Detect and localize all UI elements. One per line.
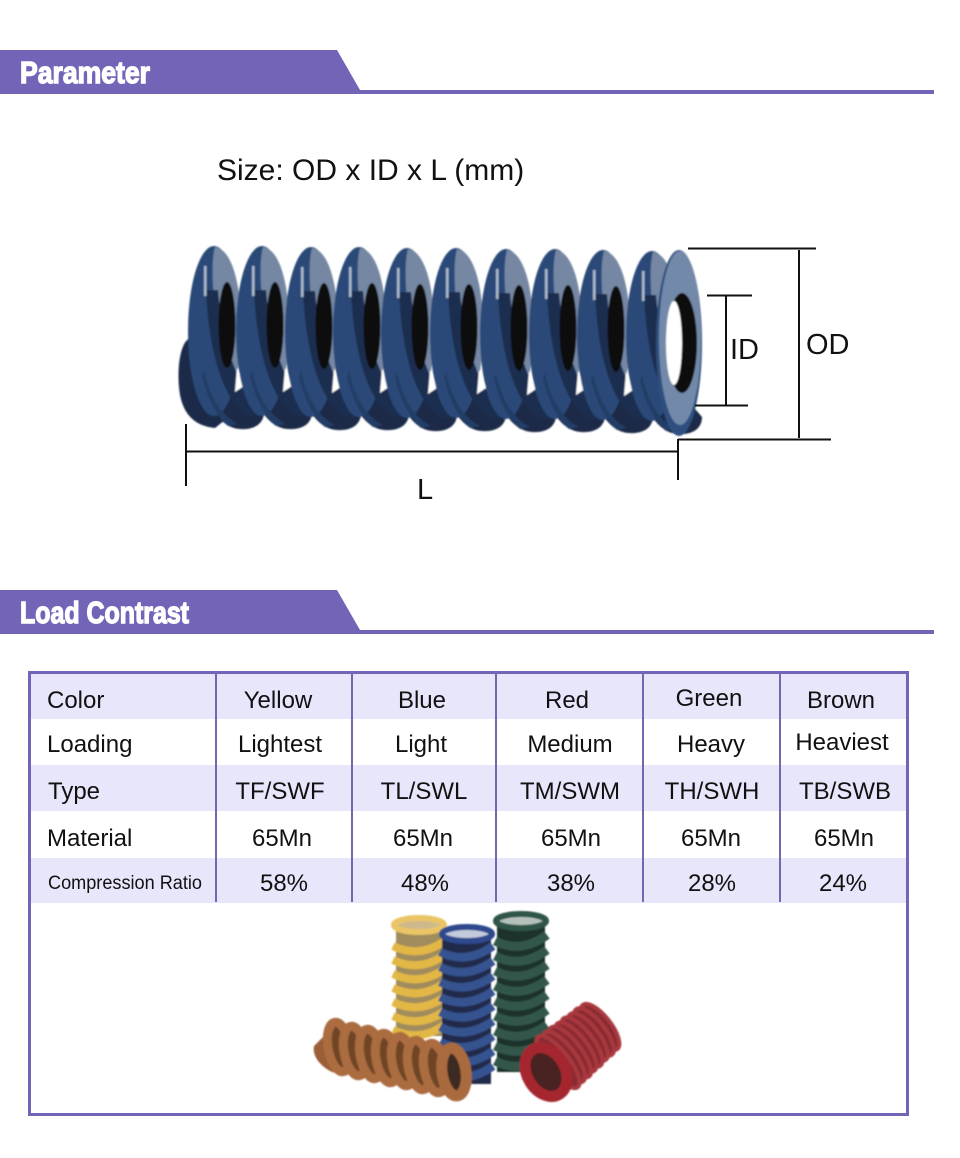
dimension lines: L — [186, 424, 678, 486]
header title: Parameter — [20, 55, 150, 90]
dimension lines: OD — [678, 248, 831, 440]
row: Loading: Light — [395, 731, 447, 758]
row: Type: Type — [48, 778, 100, 805]
row: Material: 65Mn — [814, 825, 874, 852]
row: Material: 65Mn — [252, 825, 312, 852]
row: Type: TL/SWL — [381, 778, 467, 805]
dimension lines: ID — [695, 295, 752, 406]
header banner shape — [0, 50, 934, 94]
row: Type — [48, 778, 891, 805]
icon: blue compression spring — [178, 246, 702, 436]
row: Color: Brown — [807, 687, 875, 714]
row: Type: TM/SWM — [520, 778, 620, 805]
row: Type: TB/SWB — [799, 778, 891, 805]
panel: load contrast table — [30, 672, 908, 1114]
label: OD: OD — [806, 329, 850, 361]
row: Material: 65Mn — [541, 825, 601, 852]
row: Compression Ratio: 24% — [819, 870, 867, 897]
header title: Load Contrast — [20, 595, 189, 630]
icon: blue spring — [440, 927, 493, 1084]
row: Color — [47, 685, 875, 714]
row: Material: 65Mn — [393, 825, 453, 852]
row: Material: Material — [47, 825, 132, 852]
table column separators — [216, 673, 780, 902]
row: Loading: Heavy — [677, 731, 745, 758]
label: ID: ID — [730, 334, 759, 366]
row: Compression Ratio: 58% — [260, 870, 308, 897]
row: Loading: Medium — [527, 731, 613, 758]
row: Compression Ratio — [48, 870, 867, 897]
icon: red spring — [517, 998, 626, 1104]
table row bands — [30, 673, 906, 903]
header banner shape — [0, 590, 934, 634]
row: Loading: Heaviest — [795, 729, 889, 756]
size formula text: Size: OD x ID x L (mm) — [217, 154, 524, 187]
row: Color: Yellow — [244, 687, 313, 714]
row: Loading: Loading — [47, 731, 132, 758]
row: Compression Ratio: 28% — [688, 870, 736, 897]
row: Type: TF/SWF — [235, 778, 325, 805]
row: Material: 65Mn — [681, 825, 741, 852]
row: Color: Green — [676, 685, 742, 712]
table outer border — [30, 672, 908, 1114]
row: Color: Color — [47, 687, 104, 714]
label: L: L — [417, 474, 433, 506]
row: Compression Ratio: Compression Ratio — [48, 873, 202, 894]
diagram: blue spring with dimensions — [178, 246, 850, 506]
row: Compression Ratio: 38% — [547, 870, 595, 897]
icon: green spring — [495, 914, 547, 1072]
header: Parameter — [0, 50, 934, 94]
row: Color: Blue — [398, 687, 446, 714]
icon: yellow spring — [393, 918, 446, 1036]
row: Compression Ratio: 48% — [401, 870, 449, 897]
row: Material — [47, 825, 874, 852]
row: Loading — [47, 729, 889, 758]
row: Color: Red — [545, 687, 589, 714]
header: Load Contrast — [0, 590, 934, 634]
row: Type: TH/SWH — [665, 778, 759, 805]
icon: brown spring — [314, 1020, 469, 1097]
illustration: five coloured springs — [314, 914, 626, 1104]
row: Loading: Lightest — [238, 731, 322, 758]
